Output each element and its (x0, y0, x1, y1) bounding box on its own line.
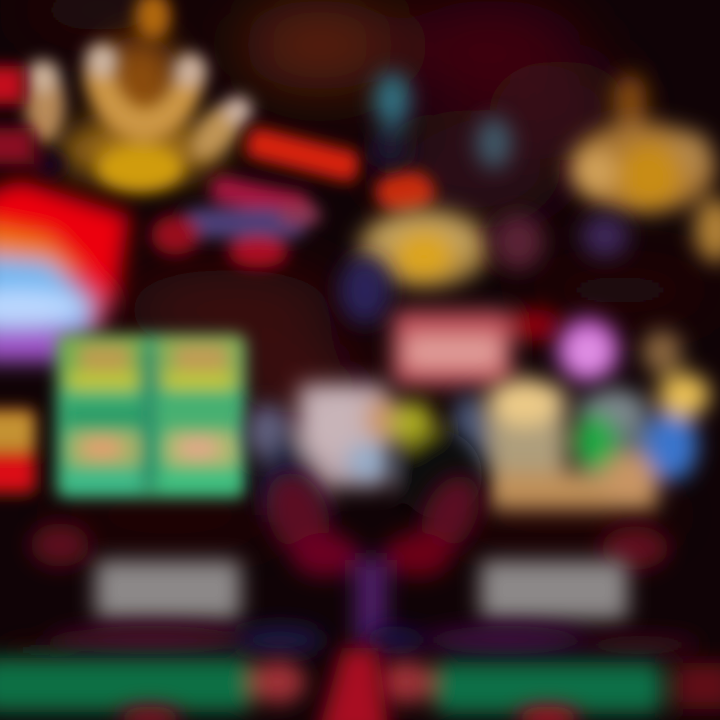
pink orb (556, 317, 620, 383)
red carpet: centre (118, 648, 580, 720)
chandelier: centre (358, 208, 490, 288)
grey sign: left (95, 560, 241, 620)
slot machine: far left (0, 408, 36, 494)
red chairs (30, 463, 669, 644)
chandelier: top left (25, 0, 255, 192)
green table: left (0, 658, 306, 712)
carpet strip (0, 624, 700, 658)
centre machines and figures (246, 383, 482, 519)
green table: right (378, 660, 720, 714)
red streaks (0, 66, 435, 268)
chandelier: right (568, 74, 720, 262)
pink sign (392, 309, 561, 386)
ceiling lights (339, 72, 629, 324)
slot machines: right group (452, 330, 710, 510)
grey sign: right (480, 560, 628, 620)
slot machines: green pair (56, 334, 246, 498)
rainbow banner: left (0, 180, 130, 362)
